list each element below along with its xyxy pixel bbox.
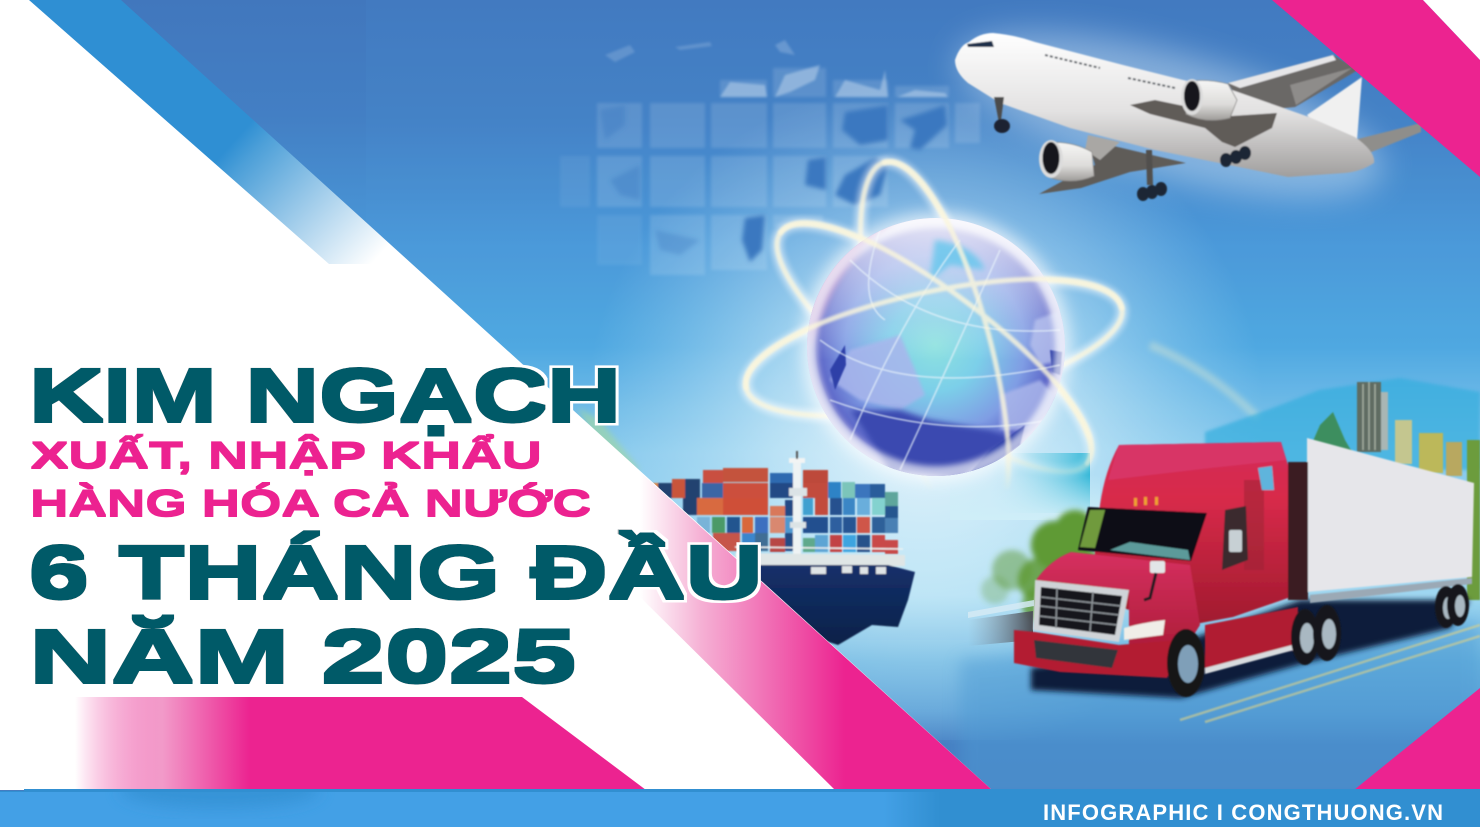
white top-right corner	[1423, 0, 1480, 60]
windshield	[1078, 507, 1207, 561]
near wing	[1039, 140, 1186, 194]
pink bottom-right triangle	[1354, 688, 1480, 790]
front wheel	[1167, 629, 1205, 697]
title line 5: NĂM 2025	[29, 615, 576, 698]
cab	[1014, 442, 1469, 697]
upper engine	[1181, 79, 1237, 120]
orbit rings behind globe	[738, 153, 1131, 480]
cargo ship	[650, 451, 915, 645]
hull	[700, 565, 915, 645]
title line 2: XUẤT, NHẬP KHẨU	[31, 434, 542, 476]
title line 4: 6 THÁNG ĐẦU	[29, 531, 763, 614]
pink top-right corner band	[1272, 0, 1480, 177]
trailer wheels	[1435, 584, 1469, 628]
teal haze behind globe and truck	[950, 453, 1100, 520]
amber lights	[1134, 497, 1158, 506]
trees behind ship	[578, 408, 640, 470]
pink bottom strip	[75, 697, 646, 790]
road lines	[1180, 625, 1480, 722]
containers	[650, 468, 898, 554]
grille	[1033, 580, 1129, 642]
drive wheels	[1291, 605, 1341, 665]
stabilizer	[1342, 123, 1421, 153]
orbit rings in front of globe	[742, 158, 1126, 478]
side step	[1205, 607, 1298, 668]
trailer	[1288, 438, 1474, 603]
deck	[735, 553, 905, 566]
road shadow	[1031, 600, 1470, 698]
landing gear	[994, 97, 1251, 201]
bumper	[1014, 630, 1178, 678]
rainbow arc	[1150, 345, 1258, 418]
fuselage	[955, 33, 1374, 177]
hood	[1036, 552, 1200, 660]
pink diagonal band	[640, 472, 992, 790]
window line	[1045, 55, 1175, 88]
airplane	[941, 0, 1421, 232]
tail fin	[1307, 77, 1362, 140]
lower engine	[1039, 140, 1094, 181]
road	[960, 620, 1480, 800]
title line 3: HÀNG HÓA CẢ NƯỚC	[30, 482, 591, 524]
footer credit: INFOGRAPHIC I CONGTHUONG.VN	[1043, 800, 1443, 825]
globe	[802, 213, 1070, 481]
title line 1: KIM NGẠCH	[29, 354, 621, 437]
mirrors	[1229, 530, 1242, 552]
world map grid	[560, 40, 980, 275]
mountains behind truck	[1205, 378, 1480, 470]
trees and roadside wall	[968, 510, 1101, 646]
far wing	[1228, 55, 1358, 112]
city skyline	[1310, 382, 1480, 600]
title	[29, 354, 763, 698]
hull windows	[811, 566, 886, 574]
white diagonal panel	[0, 0, 992, 790]
blue diagonal stripe	[29, 0, 412, 264]
wing root struts	[1130, 100, 1277, 147]
footer bar	[0, 789, 1480, 827]
mast	[789, 451, 807, 557]
